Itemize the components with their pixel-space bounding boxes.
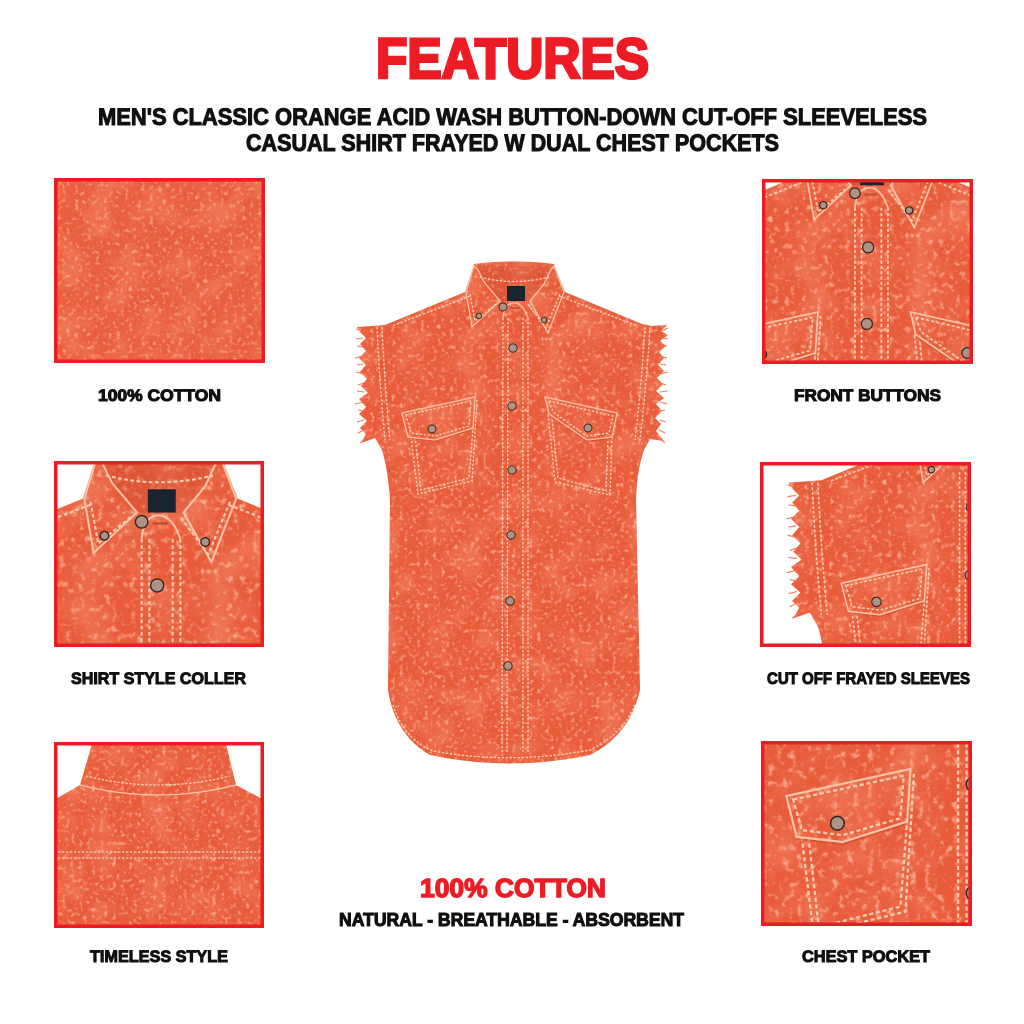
label: timeless style: TIMELESS STYLE bbox=[90, 947, 228, 966]
chest pockets bbox=[402, 397, 617, 495]
collar bbox=[466, 266, 564, 333]
central shirt bbox=[350, 255, 675, 775]
label: cut off frayed sleeves: CUT OFF FRAYED SLEEVES bbox=[767, 669, 970, 688]
subtitle: CASUAL SHIRT FRAYED W DUAL CHEST POCKETS bbox=[246, 130, 779, 157]
buttons bbox=[504, 344, 517, 670]
heading: 100% cotton: 100% COTTON bbox=[420, 873, 606, 903]
panel: chest pocket bbox=[761, 741, 972, 926]
panel: cotton fabric swatch bbox=[54, 178, 265, 363]
panel: front buttons bbox=[762, 179, 973, 364]
panel: shirt style collar bbox=[53, 452, 264, 654]
label: 100% cotton: 100% COTTON bbox=[98, 386, 221, 405]
panel: cut off frayed sleeves bbox=[760, 462, 971, 647]
title: FEATURES bbox=[376, 27, 649, 91]
label: shirt style coller: SHIRT STYLE COLLER bbox=[71, 669, 246, 688]
seams and stitching bbox=[377, 296, 650, 758]
label: chest pocket: CHEST POCKET bbox=[802, 947, 931, 966]
subtitle: MEN'S CLASSIC ORANGE ACID WASH BUTTON-DOWN CUT-OFF SLEEVELESS bbox=[98, 104, 927, 131]
panel: timeless style back view bbox=[54, 742, 264, 928]
subtitle bbox=[98, 104, 927, 157]
shirt body fabric bbox=[350, 255, 675, 775]
tagline: NATURAL - BREATHABLE - ABSORBENT bbox=[339, 910, 684, 930]
label: front buttons: FRONT BUTTONS bbox=[794, 386, 941, 405]
frayed sleeve threads bbox=[355, 328, 668, 443]
